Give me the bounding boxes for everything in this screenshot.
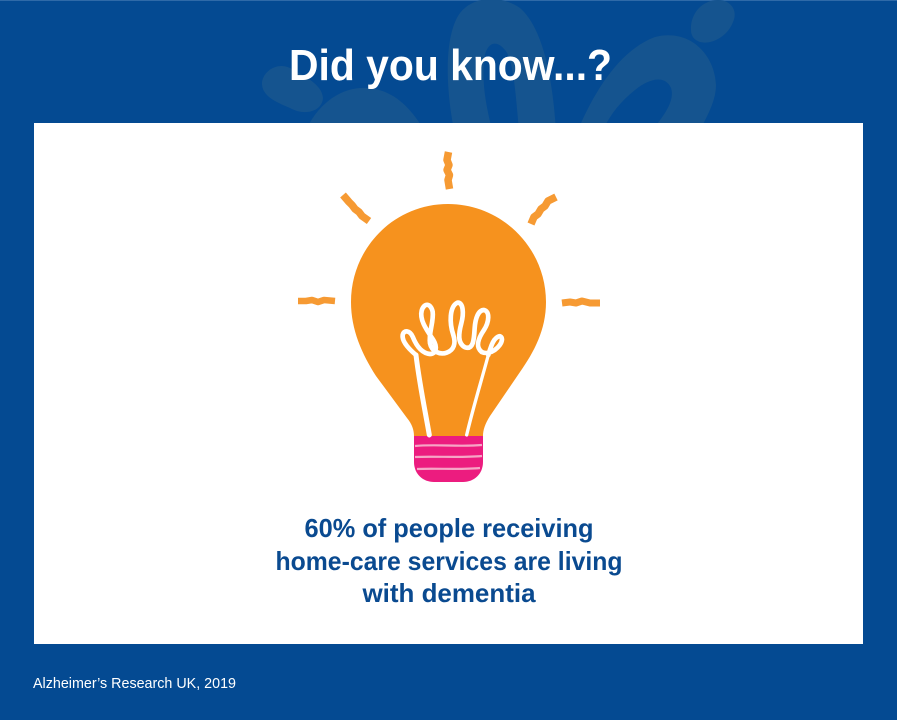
bulb base xyxy=(414,436,483,482)
statement text: 60% of people receiving xyxy=(304,513,594,543)
background watermark shapes xyxy=(262,0,735,130)
statement text: home-care services are living xyxy=(276,546,622,576)
rays xyxy=(298,152,600,303)
source footer: Alzheimer’s Research UK, 2019 xyxy=(33,675,236,692)
statement text xyxy=(276,513,622,608)
title: Did you know...? xyxy=(289,41,612,90)
panel: white card xyxy=(34,123,863,644)
bulb glass xyxy=(351,204,546,436)
icon: light bulb xyxy=(298,152,600,482)
statement text: with dementia xyxy=(362,578,536,608)
filament xyxy=(403,303,502,435)
